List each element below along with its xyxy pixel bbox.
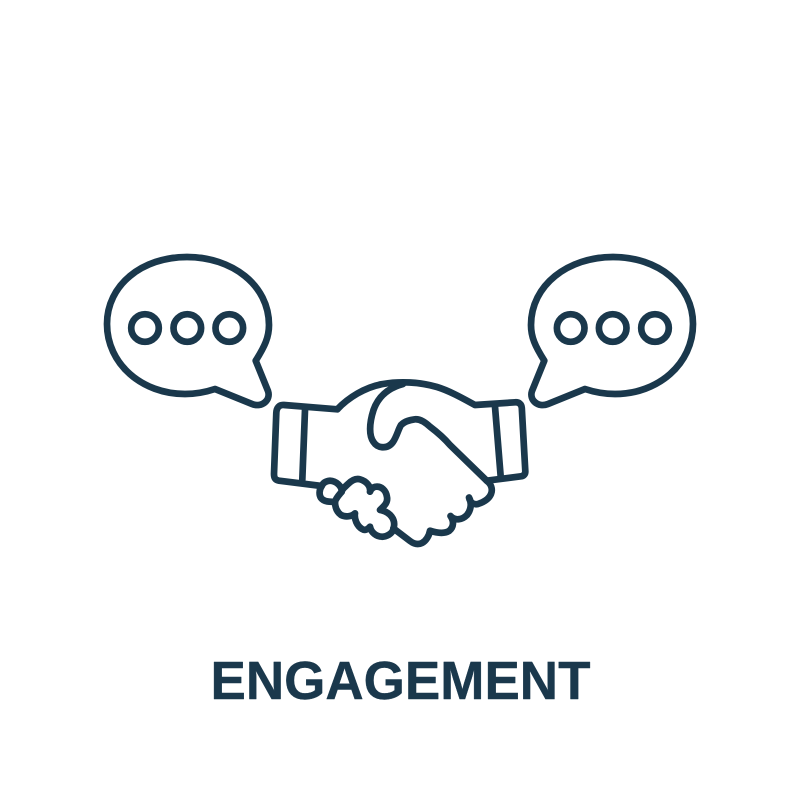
left hand fingers	[320, 479, 394, 537]
top arc and right cuff outline	[337, 382, 525, 481]
left hand small finger divider	[335, 492, 342, 502]
icon: right speech bubble	[531, 257, 693, 405]
icon: handshake	[274, 382, 525, 544]
left cuff inner line	[302, 410, 305, 480]
left cuff and sleeve outline	[274, 405, 337, 486]
icon: left speech bubble	[107, 257, 269, 405]
right cuff inner line	[495, 407, 501, 477]
thumb and right hand outline	[370, 384, 492, 544]
title: ENGAGEMENT	[210, 651, 591, 711]
